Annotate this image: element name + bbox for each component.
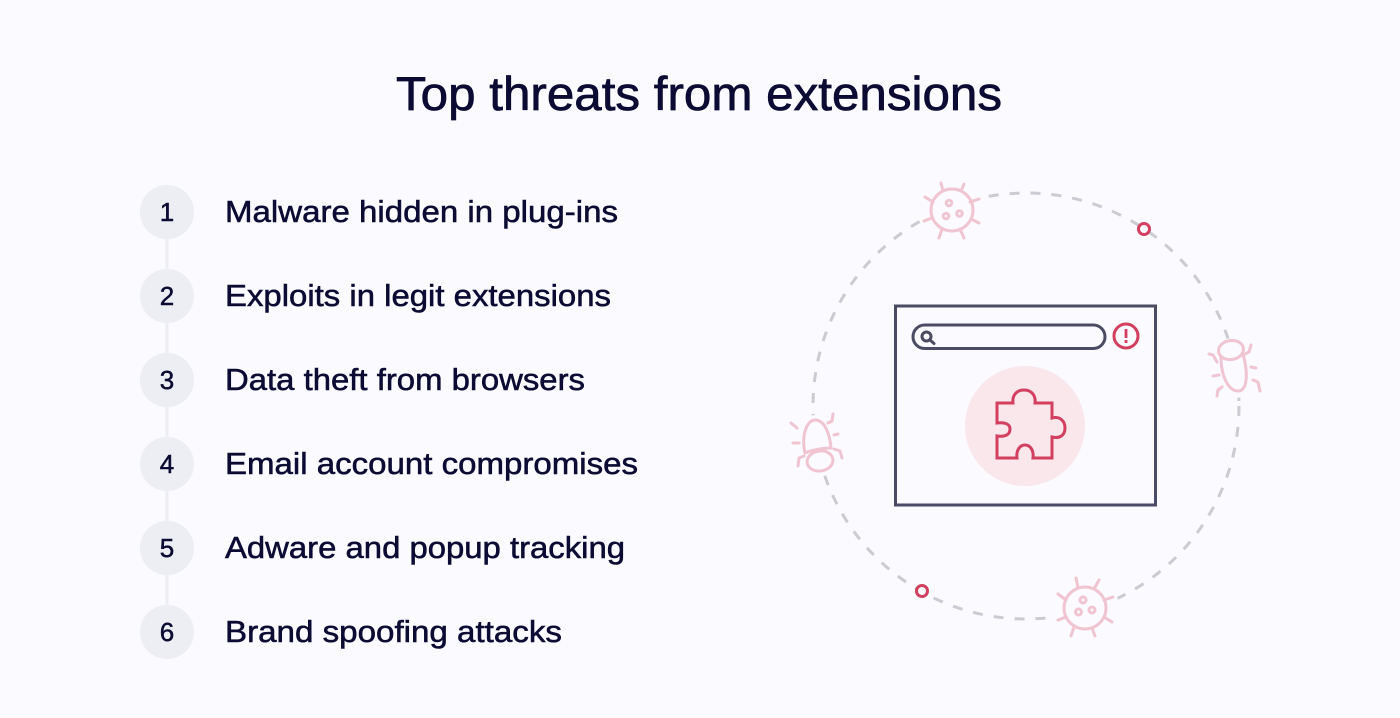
dashed orbit (813, 193, 1239, 619)
title: Top threats from extensions (396, 67, 1002, 120)
list item 3: Data theft from browsers (225, 362, 585, 397)
icon: virus bottom (1051, 574, 1119, 642)
list item 1: Malware hidden in plug-ins (225, 194, 618, 229)
list item 1 (140, 185, 618, 239)
icon: virus top (918, 176, 986, 244)
list item 6: 6 (160, 617, 174, 647)
list item 4: Email account compromises (225, 446, 638, 481)
list item 2: 2 (160, 281, 174, 311)
orbit dot bottom left (916, 586, 928, 596)
list item 6: Brand spoofing attacks (225, 614, 562, 649)
search bar (913, 325, 1105, 348)
list item 6 (140, 605, 562, 659)
list item 3: 3 (160, 365, 174, 395)
icon: puzzle piece (965, 366, 1085, 486)
list item 5: Adware and popup tracking (225, 530, 625, 565)
numbered threat list (140, 185, 638, 659)
orbit dot top right (1138, 224, 1150, 234)
illustration: browser under threat (787, 176, 1264, 642)
icon: magnifier (922, 332, 934, 344)
browser window (896, 306, 1156, 505)
icon: alert (1114, 324, 1138, 348)
list item 5: 5 (160, 533, 174, 563)
list item 1: 1 (160, 197, 174, 227)
icon: bug right (1204, 338, 1264, 398)
list item 2: Exploits in legit extensions (225, 278, 611, 313)
list item 3 (140, 353, 585, 407)
list item 5 (140, 521, 625, 575)
list item 2 (140, 269, 611, 323)
icon: bug left (787, 414, 847, 475)
list item 4 (140, 437, 638, 491)
list item 4: 4 (160, 449, 174, 479)
